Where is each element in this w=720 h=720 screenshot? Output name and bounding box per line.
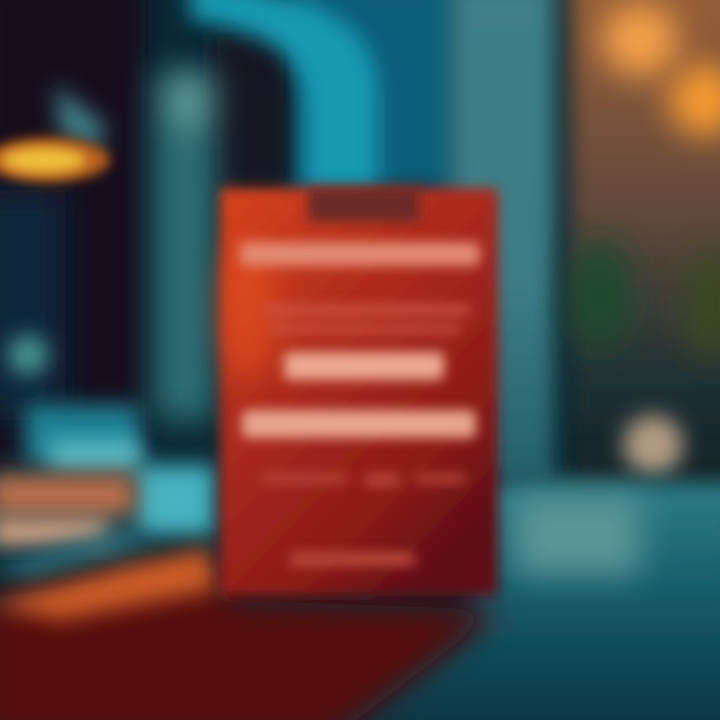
table: [0, 548, 500, 720]
floor right: [320, 482, 720, 720]
pale round object: [623, 415, 683, 475]
sign faint lines: [265, 305, 470, 333]
bright teal arch: [190, 0, 378, 190]
stack of books: [0, 405, 215, 582]
sign middle word: [284, 352, 444, 380]
sign lower lines: [262, 474, 465, 566]
teal pillar left: [155, 70, 215, 420]
lamp: [0, 85, 110, 182]
sign top tab: [308, 188, 420, 222]
small glow orb: [8, 335, 48, 375]
sign heading line: [240, 242, 480, 266]
warm wall with lights: [570, 0, 720, 490]
pale teal column right of sign: [450, 0, 555, 480]
sign left glow: [220, 240, 276, 380]
pale floor patch: [515, 495, 640, 575]
light glow upper: [602, 4, 678, 76]
plant: [568, 240, 720, 360]
sign large line: [242, 410, 476, 438]
red sign board: [220, 188, 498, 596]
light glow lower: [669, 64, 720, 136]
